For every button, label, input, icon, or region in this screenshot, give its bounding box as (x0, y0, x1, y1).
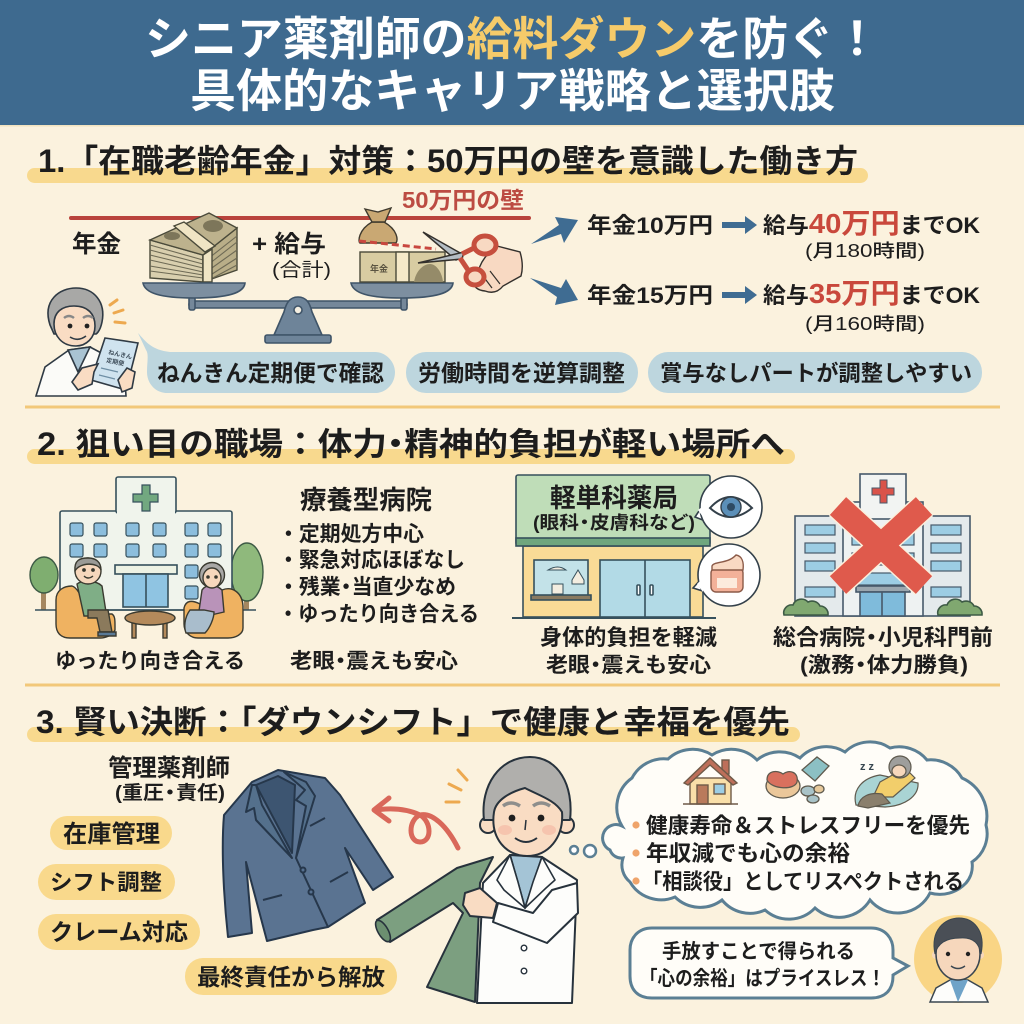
shop sign (533, 483, 695, 533)
pill: claims: クレーム対応 (50, 919, 188, 945)
pill: inventory (50, 816, 172, 850)
shop sign: (眼科・皮膚科など) (533, 513, 695, 533)
shirt (510, 855, 542, 908)
green jacket (377, 857, 493, 1002)
icon: money stack (150, 213, 237, 282)
label: pension: 年金 (72, 231, 121, 258)
hand (463, 888, 497, 918)
motion ticks (446, 770, 467, 802)
illustration: care hospital (30, 477, 263, 638)
list: benefits (632, 814, 970, 894)
thought dots (570, 845, 596, 857)
list: benefits: 「相談役」としてリスペクトされる (642, 870, 964, 894)
illustration: crossed general hospital (784, 474, 982, 616)
caption: pharmacy (540, 625, 717, 677)
attention ticks (110, 300, 125, 323)
heading: section 3: 3. 賢い決断：「ダウンシフト」で健康と幸福を優先 (36, 704, 790, 740)
pill: check statement: ねんきん定期便で確認 (157, 360, 384, 386)
icon: hand with scissors (418, 232, 522, 292)
panel: section 3 downshift (27, 704, 1002, 1003)
list: benefits: 年収減でも心の余裕 (646, 841, 850, 866)
lapels (497, 855, 555, 908)
thought cloud (603, 742, 987, 919)
speech bubble: priceless: 「心の余裕」はプライスレス！ (640, 967, 885, 990)
caption: general hospital (773, 625, 993, 677)
icon: trimmed banknotes: 年金 (370, 263, 388, 274)
label: managing pharmacist: 管理薬剤師 (108, 755, 230, 782)
shop building (512, 475, 716, 618)
label: managing pharmacist: (重圧・責任) (115, 782, 225, 804)
caption: pharmacy: 身体的負担を軽減 (540, 625, 717, 650)
caption: general hospital: (激務・体力勝負) (800, 654, 968, 677)
panel: section 2 workplaces (27, 426, 993, 677)
case: pension 15 (587, 278, 980, 334)
case: pension 15: 年金15万円 (587, 283, 713, 308)
coat buttons (521, 945, 527, 974)
label: plus salary: (合計) (272, 259, 331, 281)
heading: section 2: 2. 狙い目の職場：体力 ・精神的負担が軽い場所へ (37, 426, 785, 462)
icon: navy jacket (223, 770, 393, 941)
pill: shift (38, 864, 175, 900)
icon: cream bubble (693, 544, 760, 606)
jacket cuff (373, 918, 393, 944)
white coat (477, 855, 577, 1003)
illustration: pharmacy (512, 475, 762, 618)
title banner: 具体的なキャリア戦略と選択肢 (190, 65, 835, 117)
text block: care hospital (278, 485, 479, 673)
caption: general hospital: 総合病院・小児科門前 (773, 625, 993, 650)
icon: trimmed banknotes (360, 252, 445, 282)
text block: care hospital: ・残業・当直少なめ (278, 575, 456, 599)
case: pension 10: 年金10万円 (587, 213, 713, 238)
panel: section 1 pension (27, 143, 982, 396)
pill: check statement (138, 333, 395, 393)
pill: shift: シフト調整 (50, 870, 162, 895)
speech bubble: priceless (630, 928, 908, 998)
figure: senior pharmacist with statement (36, 288, 138, 396)
label: plus salary (252, 231, 331, 281)
case: pension 10: 給与40万円までOK (763, 208, 980, 239)
case: pension 15: 給与35万円までOK (763, 278, 980, 309)
list: benefits: 健康寿命＆ストレスフリーを優先 (646, 814, 970, 838)
arrow: to 10万円 case (531, 217, 578, 244)
figure: senior pharmacist with statement: 定期便 (106, 356, 125, 368)
figure: senior pharmacist with statement: ねんきん (108, 349, 133, 361)
pill: inventory: 在庫管理 (63, 821, 160, 848)
icon: house (683, 758, 738, 804)
table (125, 611, 175, 638)
text block: care hospital: 老眼・震えも安心 (290, 650, 458, 673)
title banner (0, 0, 1024, 126)
seated woman (184, 562, 243, 638)
coat arm (493, 883, 578, 943)
icon: person resting: z z (860, 761, 875, 773)
icon: balance scale (143, 283, 453, 343)
pill: released: 最終責任から解放 (197, 964, 385, 990)
shop sign: 軽単科薬局 (550, 483, 678, 513)
caption: face to face: ゆったり向き合える (55, 650, 245, 673)
text block: care hospital: ・ゆったり向き合える (278, 603, 479, 626)
building (35, 477, 256, 610)
head (480, 757, 574, 856)
text block: care hospital: 療養型病院 (300, 485, 432, 515)
text block: care hospital: ・緊急対応ほぼなし (278, 549, 465, 572)
pill: adjust hours: 労働時間を逆算調整 (418, 360, 625, 386)
caption: pharmacy: 老眼・震えも安心 (546, 654, 711, 677)
arrow: red curl (374, 798, 458, 848)
tree right (231, 543, 263, 610)
tree left (30, 557, 58, 610)
icon: bento and pills (766, 757, 829, 803)
icon: eye bubble (695, 476, 762, 538)
text block: care hospital: ・定期処方中心 (278, 523, 424, 546)
icon: young pharmacist avatar (914, 915, 1002, 1003)
cross mark (838, 506, 924, 585)
pill: part time: 賞与なしパートが調整しやすい (660, 361, 972, 386)
label: managing pharmacist (108, 755, 230, 804)
cut line (359, 241, 436, 249)
pill: claims (38, 914, 200, 950)
case: pension 10 (587, 208, 980, 261)
arrow: to 15万円 case (530, 278, 578, 305)
pill: adjust hours (406, 352, 638, 393)
speech bubble: priceless: 手放すことで得られる (662, 940, 855, 963)
figure: senior pharmacist removing jacket (373, 757, 578, 1003)
pill: released (185, 958, 397, 995)
case: pension 15: (月160時間) (805, 314, 925, 334)
wall line: 50万円の壁 (402, 187, 524, 213)
seated man (56, 558, 116, 638)
case: pension 10: (月180時間) (805, 241, 925, 261)
pill: part time (648, 352, 982, 393)
icon: person resting (855, 756, 918, 808)
heading: section 1: 1.「在職老齢年金」対策：50万円の壁を意識した働き方 (38, 143, 858, 179)
title banner: シニア薬剤師の給料ダウンを防ぐ！ (145, 13, 880, 65)
hospital building (784, 474, 982, 616)
icon: money bag (359, 208, 397, 243)
label: plus salary: + 給与 (252, 231, 326, 258)
